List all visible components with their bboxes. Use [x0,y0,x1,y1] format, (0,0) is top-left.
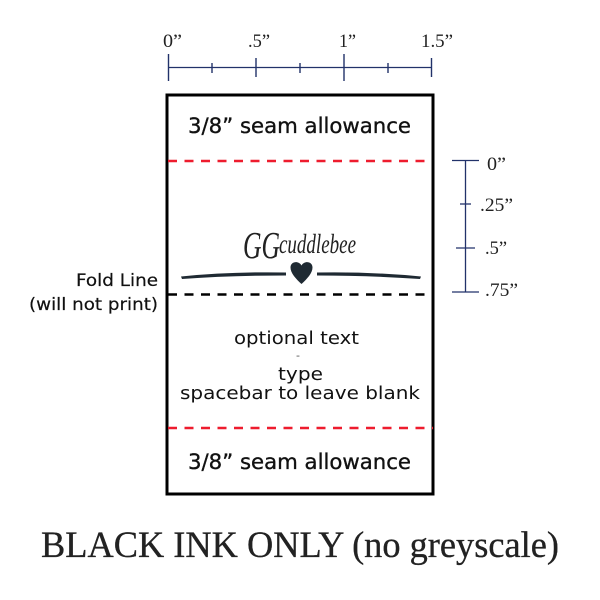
horizontal ruler: 1.5” [421,32,453,52]
bottom caption: BLACK INK ONLY (no greyscale) [41,525,559,566]
optional text block: - [296,349,300,362]
horizontal ruler: 0” [163,32,182,52]
brand name script: cuddlebee [279,229,356,259]
vertical ruler: .25” [480,196,513,216]
vertical ruler: .75” [485,281,518,301]
optional text block: type [278,364,323,385]
vertical ruler: .5” [485,239,507,259]
bottom seam allowance text: 3/8” seam allowance [188,450,411,474]
fold line label: Fold Line [76,271,158,291]
horizontal ruler: .5” [248,32,270,52]
optional text block [180,328,421,404]
optional text block: spacebar to leave blank [180,383,421,404]
bottom red seam line [168,427,433,429]
label outline panel [167,95,433,494]
fold line label: (will not print) [29,295,158,315]
fold line label [29,271,158,315]
brand name script: GG [243,225,280,267]
vertical ruler [452,155,518,301]
horizontal ruler [163,32,453,81]
horizontal ruler: 1” [339,32,356,52]
vertical ruler: 0” [487,155,506,175]
top red seam line [168,160,425,162]
heart flourish [181,262,421,284]
top seam allowance text: 3/8” seam allowance [188,114,411,138]
black fold line [168,293,425,296]
brand name script [243,225,356,267]
optional text block: optional text [234,328,359,349]
